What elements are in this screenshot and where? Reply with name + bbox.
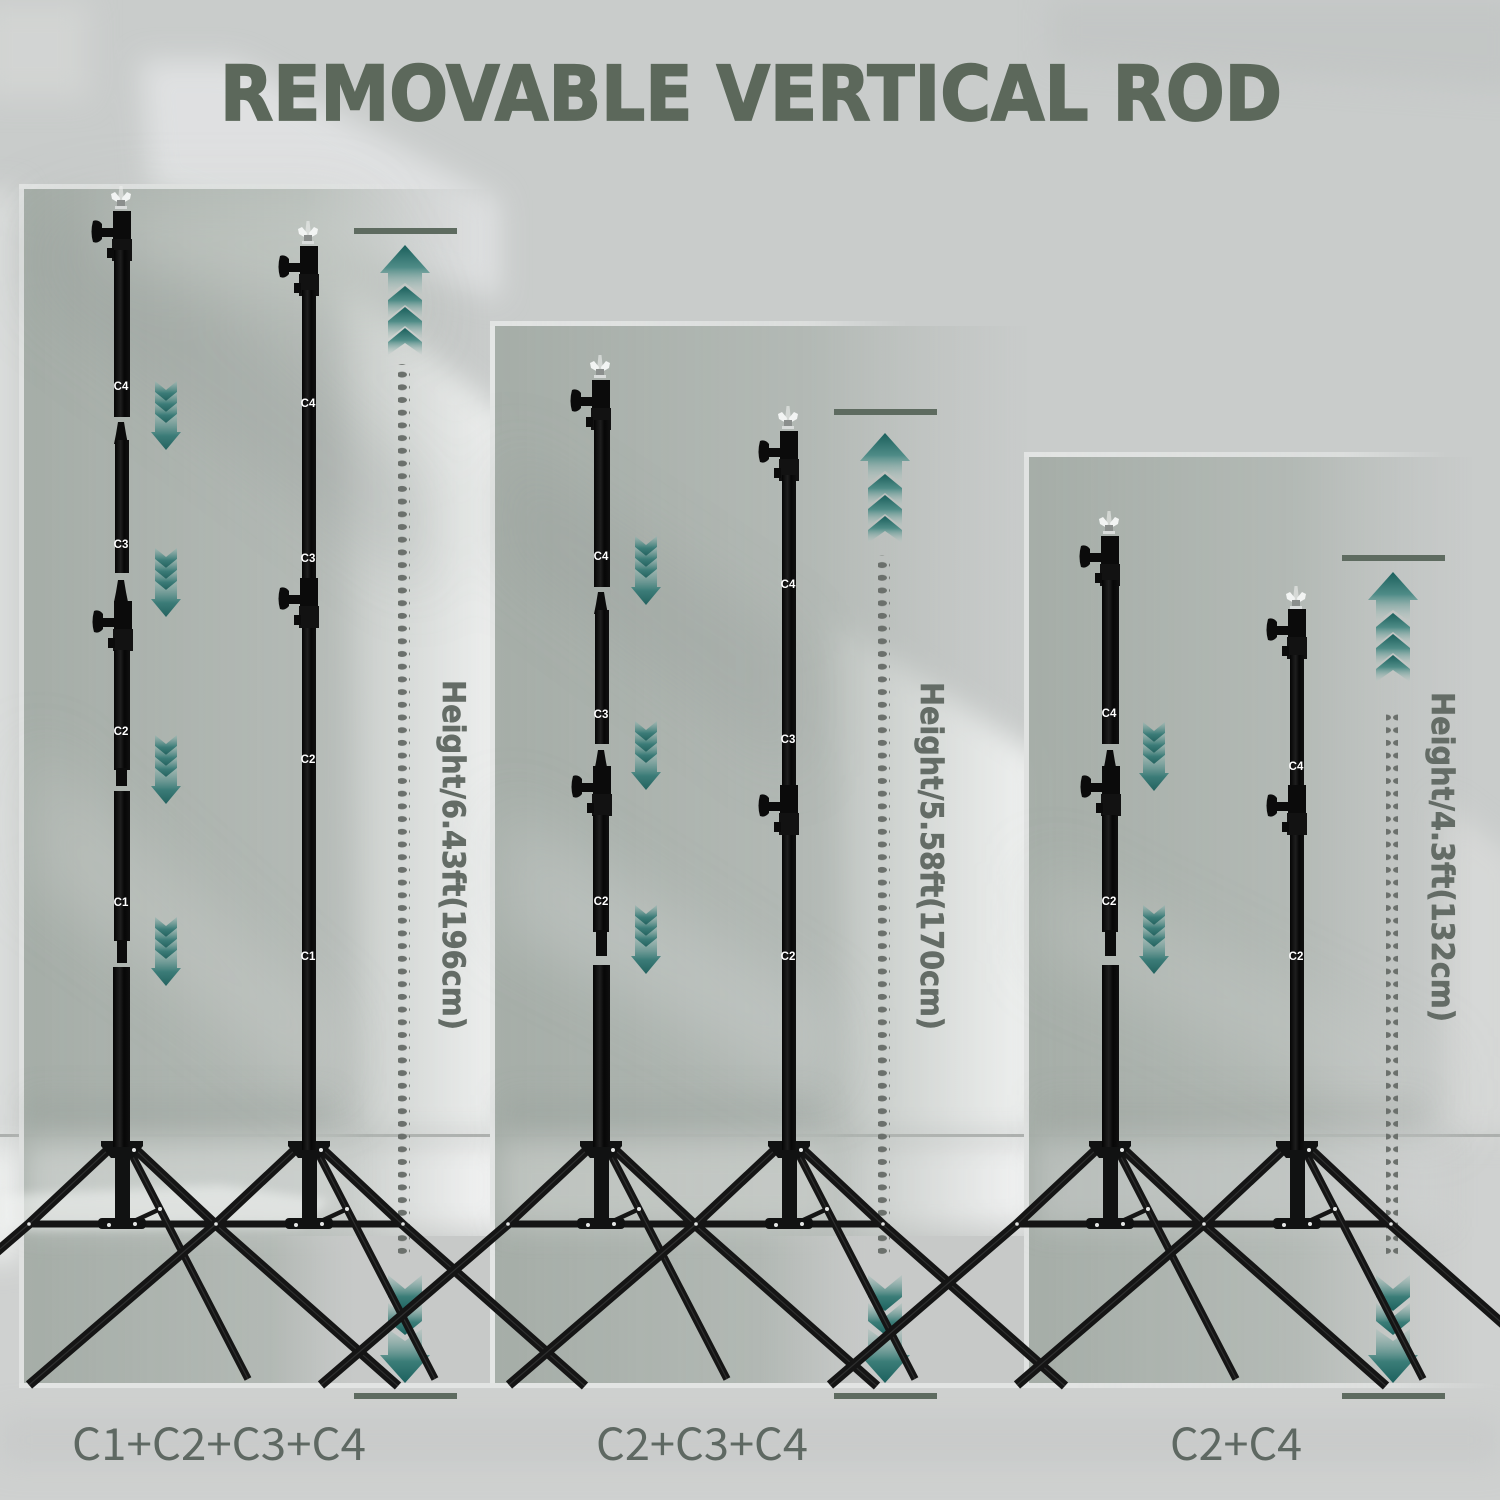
- stand 3: disassembled C2 C3 C4: C2: [594, 896, 608, 908]
- stand 4: assembled C2 C3 C4: [509, 406, 1065, 1386]
- down arrows: stand 1: [151, 381, 181, 986]
- measurement: 6.43ft height scale: [354, 228, 457, 1399]
- height label: 6.43ft: Height/6.43ft(196cm): [435, 680, 471, 1030]
- stand 2: assembled C1 C2 C3 C4: [29, 221, 585, 1386]
- down arrows: stand 5: [1139, 722, 1169, 974]
- stand 2: assembled C1 C2 C3 C4: C4: [301, 398, 316, 410]
- stand 2: assembled C1 C2 C3 C4: C3: [301, 553, 315, 565]
- stand 4: assembled C2 C3 C4: C2: [781, 951, 795, 963]
- height label: 5.58ft: Height/5.58ft(170cm): [913, 682, 949, 1030]
- stand 6: assembled C2 C4: C4: [1289, 761, 1304, 773]
- stand 2: assembled C1 C2 C3 C4: C1: [301, 951, 316, 963]
- stand 1: disassembled C1 C2 C3 C4: C2: [114, 726, 128, 738]
- stand 3: disassembled C2 C3 C4: [321, 355, 877, 1386]
- stand 3: disassembled C2 C3 C4: C3: [594, 709, 608, 721]
- stand 5: disassembled C2 C4: C2: [1102, 896, 1116, 908]
- stand 5: disassembled C2 C4: [830, 511, 1386, 1386]
- stand 1: disassembled C1 C2 C3 C4: C4: [114, 381, 129, 393]
- caption: C2+C4: C2+C4: [1170, 1409, 1302, 1473]
- panel: C1+C2+C3+C4 backdrop: [19, 184, 491, 1388]
- measurement: 5.58ft height scale: [834, 409, 937, 1399]
- stand 5: disassembled C2 C4: C4: [1102, 708, 1117, 720]
- stand 4: assembled C2 C3 C4: C4: [781, 579, 796, 591]
- stand 2: assembled C1 C2 C3 C4: C2: [301, 754, 315, 766]
- title: REMOVABLE VERTICAL ROD: [220, 49, 1282, 138]
- stand 6: assembled C2 C4: [1017, 586, 1500, 1386]
- stand 6: assembled C2 C4: C2: [1289, 951, 1303, 963]
- stand 1: disassembled C1 C2 C3 C4: C3: [114, 539, 128, 551]
- stand 1: disassembled C1 C2 C3 C4: C1: [114, 897, 129, 909]
- caption: C2+C3+C4: C2+C3+C4: [596, 1409, 808, 1473]
- stand 1: disassembled C1 C2 C3 C4: [0, 186, 398, 1386]
- stand 3: disassembled C2 C3 C4: C4: [594, 551, 609, 563]
- panel: C2+C3+C4 backdrop: [490, 321, 1028, 1388]
- light and shadow over panels: [0, 200, 1446, 1383]
- panel: C2+C4 backdrop: [1024, 452, 1500, 1388]
- stand 4: assembled C2 C3 C4: C3: [781, 734, 795, 746]
- height label: 4.3ft: Height/4.3ft(132cm): [1424, 692, 1460, 1022]
- caption: C1+C2+C3+C4: C1+C2+C3+C4: [72, 1409, 366, 1473]
- measurement: 4.3ft height scale: [1342, 555, 1445, 1399]
- down arrows: stand 3: [631, 536, 661, 974]
